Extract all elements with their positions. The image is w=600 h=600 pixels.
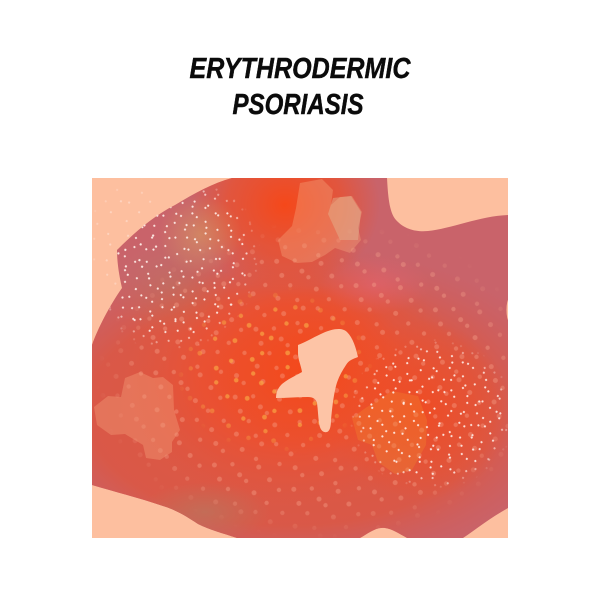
white scale dots: top left bbox=[109, 188, 258, 348]
plaque cluster: right bbox=[352, 391, 427, 474]
panel: skin illustration bbox=[92, 178, 508, 538]
plaque cluster: left bbox=[94, 372, 180, 460]
orange dots bbox=[180, 293, 370, 450]
title bbox=[190, 53, 411, 121]
centre skin patch bbox=[276, 329, 358, 432]
title: ERYTHRODERMIC bbox=[190, 53, 411, 85]
yellow blob bbox=[168, 204, 234, 264]
skin background bbox=[92, 178, 508, 538]
white scale dots: faint on skin bbox=[93, 189, 166, 290]
pink dots bbox=[109, 232, 508, 530]
title: PSORIASIS bbox=[232, 89, 364, 121]
lesion: erythrodermic patch bbox=[92, 178, 508, 538]
peach notch: right edge bbox=[506, 300, 508, 320]
plaque cluster: top bbox=[278, 179, 362, 263]
white scale dots: right spiral bbox=[350, 339, 508, 488]
